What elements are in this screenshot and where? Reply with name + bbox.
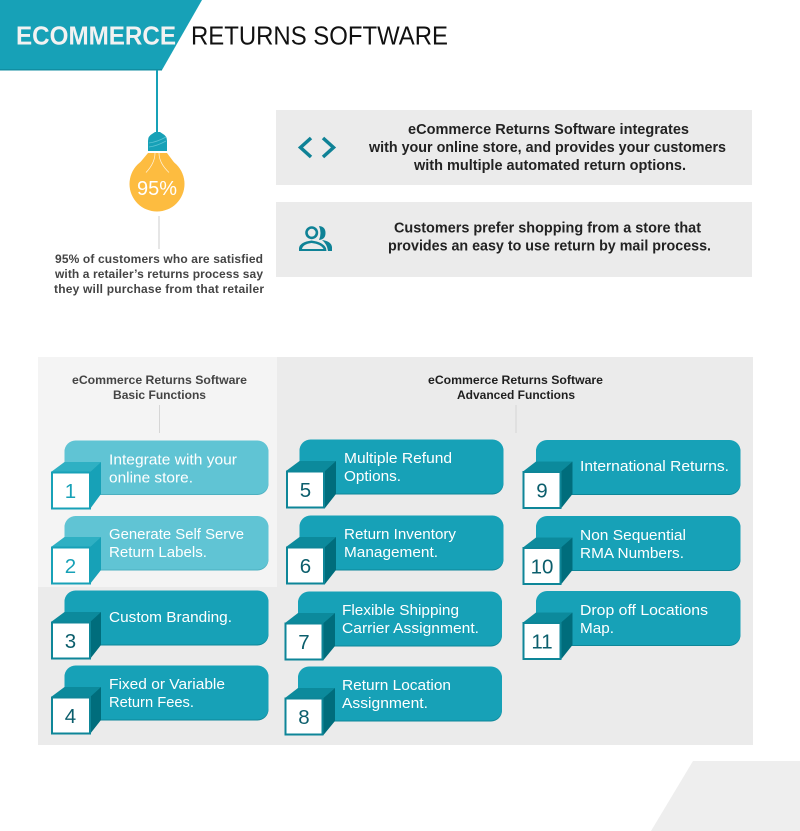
heading: basic functions: eCommerce Returns Software: [72, 373, 247, 387]
card 1: online store.: [109, 470, 193, 486]
icon: code brackets: [300, 138, 334, 157]
card 11: Map.: [580, 621, 614, 637]
icon: light bulb with 95%: 95%: [137, 178, 177, 200]
card 3: Custom Branding.: [109, 610, 232, 626]
title text: RETURNS SOFTWARE: [191, 20, 448, 50]
card 9: 9: [536, 480, 548, 502]
card 4: Return Fees.: [109, 695, 194, 711]
card 8: Return Location: [342, 678, 451, 694]
card 10: Non Sequential: [580, 528, 686, 544]
card 6: [286, 516, 504, 584]
heading: basic functions: Basic Functions: [113, 388, 206, 402]
card 7: Flexible Shipping: [342, 603, 459, 619]
card 3: [51, 590, 268, 659]
card 5: Options.: [344, 469, 401, 485]
heading: advanced functions: [428, 373, 603, 402]
panel: integration info: [276, 110, 752, 185]
card 9: International Returns.: [580, 459, 729, 475]
integration text: eCommerce Returns Software integrates: [408, 122, 689, 138]
card 2: 2: [65, 555, 76, 578]
card 2: Return Labels.: [109, 545, 207, 561]
card 5: 5: [300, 479, 311, 502]
card 3: 3: [65, 630, 76, 653]
advanced divider: [516, 405, 517, 433]
card 4: [51, 666, 268, 734]
heading: advanced functions: Advanced Functions: [457, 388, 575, 402]
statistic caption: they will purchase from that retailer: [54, 282, 264, 296]
statistic caption: 95% of customers who are satisfied: [55, 252, 263, 266]
card 7: Carrier Assignment.: [342, 621, 479, 637]
preference text: [388, 220, 711, 254]
connector line: [158, 216, 160, 249]
card 8: [285, 666, 502, 735]
integration text: [368, 122, 726, 174]
card 10: 10: [531, 556, 553, 578]
integration text: with your online store, and provides your customers: [368, 140, 726, 156]
panel: basic functions highlight: [38, 357, 277, 587]
preference text: Customers prefer shopping from a store that: [394, 220, 701, 236]
card 1: Integrate with your: [109, 452, 237, 468]
integration text: with multiple automated return options.: [413, 158, 686, 174]
card 1: [51, 440, 268, 509]
card 1: 1: [65, 480, 76, 503]
card 9: [523, 440, 740, 508]
card 8: 8: [298, 706, 310, 729]
icon: users: [299, 226, 332, 251]
card 10: [523, 516, 740, 584]
card 4: Fixed or Variable: [109, 677, 225, 693]
card 11: Drop off Locations: [580, 603, 708, 619]
card 11: 11: [531, 630, 553, 654]
card 4: 4: [65, 705, 76, 728]
card 10: RMA Numbers.: [580, 546, 684, 562]
heading: basic functions: [72, 373, 247, 402]
corner decoration: [651, 761, 800, 831]
heading: advanced functions: eCommerce Returns Software: [428, 373, 603, 387]
preference text: provides an easy to use return by mail process.: [388, 238, 711, 254]
functions background: [38, 357, 753, 745]
card 6: Management.: [344, 545, 438, 561]
title banner: [0, 0, 202, 70]
card 5: [286, 440, 504, 508]
card 6: 6: [300, 555, 311, 578]
statistic caption: with a retailer’s returns process say: [54, 267, 263, 281]
card 8: Assignment.: [342, 696, 428, 712]
card 2: Generate Self Serve: [109, 527, 244, 543]
panel: customer preference info: [276, 202, 752, 277]
statistic caption: [54, 252, 264, 296]
card 7: [285, 592, 502, 660]
icon: light bulb with 95%: [130, 70, 184, 212]
card 7: 7: [298, 631, 310, 654]
card 5: Multiple Refund: [344, 451, 452, 467]
card 11: [523, 591, 740, 660]
card 2: [51, 516, 268, 584]
card 6: Return Inventory: [344, 527, 457, 543]
title banner: ECOMMERCE: [16, 20, 176, 50]
basic divider: [159, 405, 160, 433]
